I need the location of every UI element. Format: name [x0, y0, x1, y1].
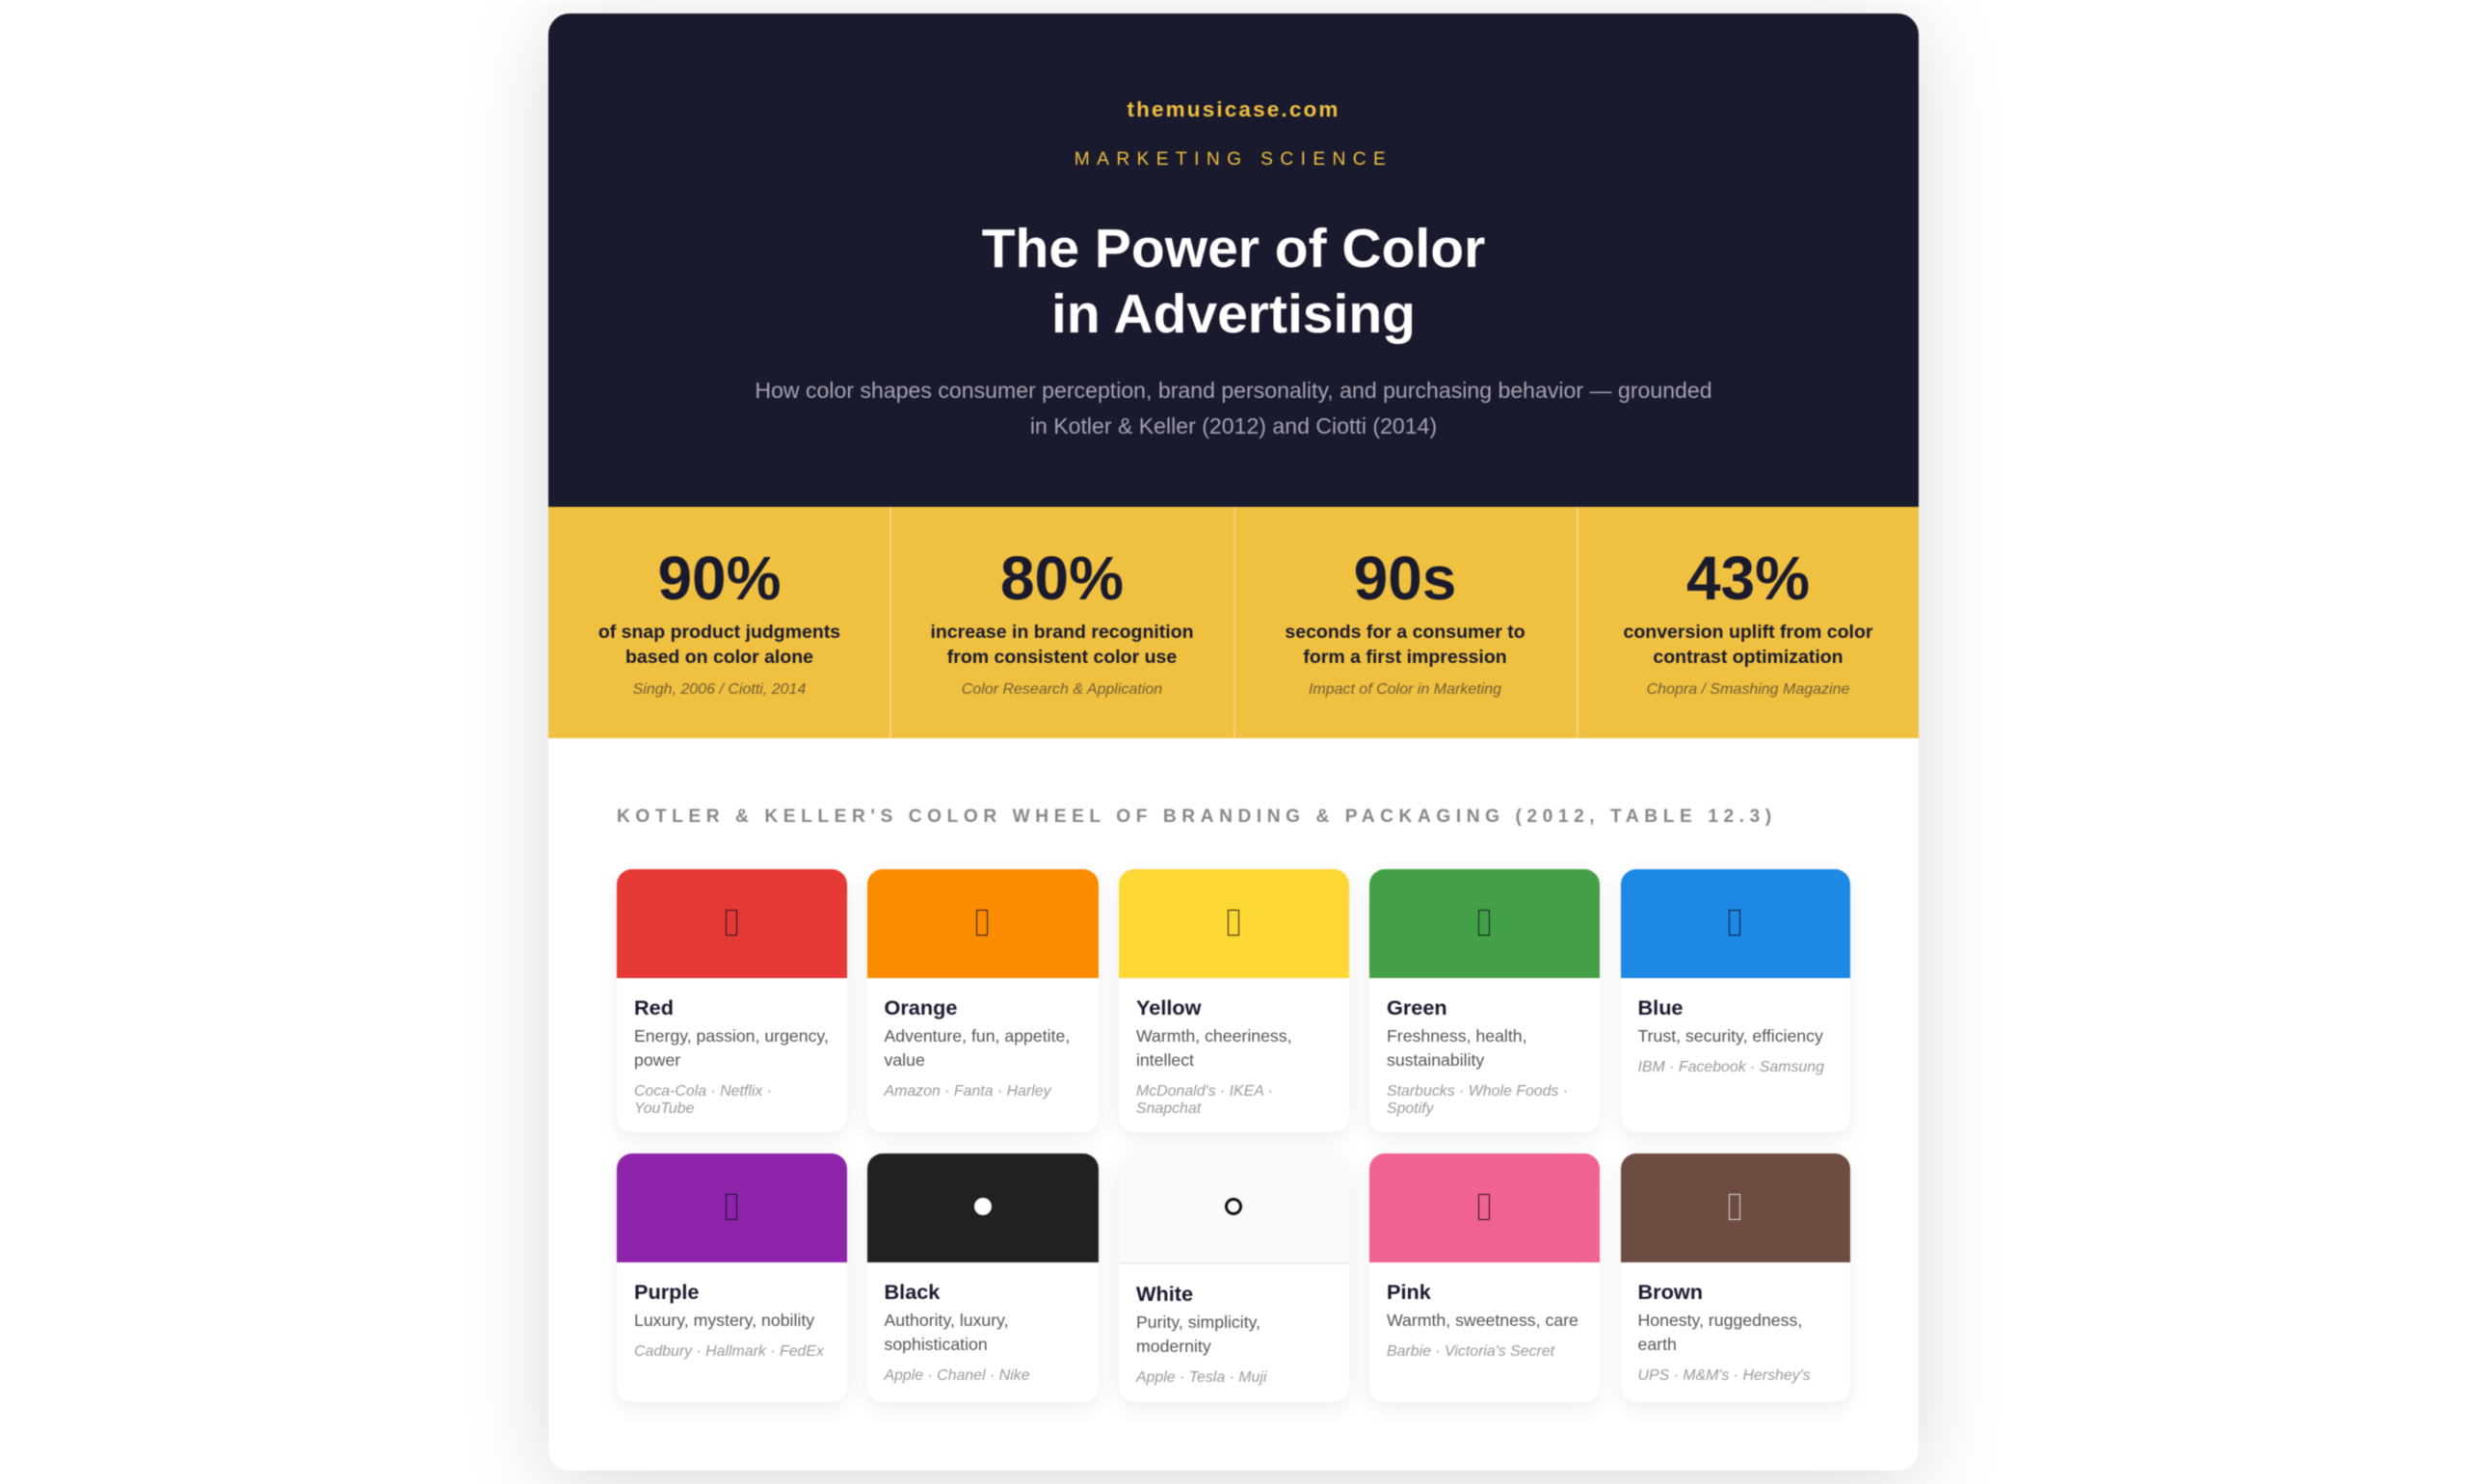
stat: 90% snap judgments: of snap product judgments — [598, 621, 840, 642]
card: orange: Adventure, fun, appetite, — [885, 1026, 1070, 1046]
card: brown: UPS · M&M's · Hershey's — [1638, 1366, 1811, 1384]
card: yellow — [1119, 869, 1349, 1132]
stat: 90% snap judgments: based on color alone — [625, 647, 813, 668]
card: yellow: intellect — [1136, 1050, 1194, 1070]
card: red: power — [634, 1050, 680, 1070]
card: black: sophistication — [885, 1335, 988, 1354]
icon: purple swatch — [617, 1153, 846, 1262]
card: brown — [1621, 1153, 1850, 1402]
icon: brown swatch — [1621, 1153, 1850, 1262]
card: black — [867, 1153, 1099, 1402]
icon: white swatch with ring — [1119, 1153, 1349, 1264]
card: pink: Pink — [1387, 1280, 1431, 1304]
section heading: KOTLER & KELLER'S COLOR WHEEL OF BRANDING & PACKAGING (2012, TABLE 12.3) — [617, 807, 1777, 827]
stat: 43% conversion uplift: 43% — [1686, 543, 1810, 613]
stat: 80% brand recognition — [930, 543, 1194, 698]
card: white: Purity, simplicity, — [1136, 1312, 1260, 1332]
stat: 80% brand recognition: 80% — [1000, 543, 1124, 613]
site name: themusicase.com — [1127, 97, 1340, 121]
panel: header — [548, 13, 1919, 507]
card: green: Spotify — [1387, 1100, 1434, 1116]
card: black: Apple · Chanel · Nike — [885, 1366, 1030, 1384]
card: black: Black — [885, 1280, 940, 1304]
stat: 90s first impression: Impact of Color in Marketing — [1309, 681, 1501, 698]
card: green: Starbucks · Whole Foods · — [1387, 1083, 1568, 1099]
eyebrow: MARKETING SCIENCE — [1074, 148, 1393, 170]
stat: 90s first impression — [1285, 543, 1525, 698]
stat: 43% conversion uplift: Chopra / Smashing Magazine — [1647, 681, 1849, 698]
stat: 90s first impression: form a first impression — [1303, 647, 1507, 668]
card: yellow: McDonald's · IKEA · — [1136, 1083, 1273, 1099]
stat: 90s first impression: seconds for a consumer to — [1285, 621, 1525, 642]
subtitle — [755, 378, 1712, 439]
stat: 80% brand recognition: Color Research & Application — [962, 681, 1162, 698]
subtitle: How color shapes consumer perception, brand personality, and purchasing behavior — grounded — [755, 378, 1712, 403]
card: brown: Honesty, ruggedness, — [1638, 1311, 1802, 1330]
card: purple: Luxury, mystery, nobility — [634, 1311, 814, 1330]
icon: blue swatch — [1621, 869, 1850, 978]
card: green: Green — [1387, 995, 1447, 1020]
card: green — [1369, 869, 1600, 1132]
card: orange: Amazon · Fanta · Harley — [885, 1083, 1051, 1099]
card: red: Red — [634, 995, 674, 1020]
icon: red swatch — [617, 869, 846, 978]
card: pink: Warmth, sweetness, care — [1387, 1311, 1578, 1330]
card: red: Coca-Cola · Netflix · — [634, 1083, 772, 1099]
title: The Power of Color — [982, 218, 1485, 279]
card: red — [617, 869, 846, 1132]
card: black: Authority, luxury, — [885, 1311, 1009, 1330]
stat: 43% conversion uplift: conversion uplift from color — [1624, 621, 1872, 642]
card: orange: Orange — [885, 995, 957, 1020]
card: blue: IBM · Facebook · Samsung — [1638, 1058, 1824, 1075]
icon: black swatch with white dot — [867, 1153, 1099, 1262]
stat: 90% snap judgments — [597, 543, 840, 698]
title: in Advertising — [1051, 283, 1416, 345]
card: yellow: Snapchat — [1136, 1100, 1201, 1116]
card: brown: earth — [1638, 1335, 1677, 1354]
icon: orange swatch — [867, 869, 1099, 978]
stat: 43% conversion uplift — [1623, 543, 1873, 698]
stat: 80% brand recognition: from consistent color use — [947, 647, 1177, 668]
card: purple: Cadbury · Hallmark · FedEx — [634, 1343, 824, 1359]
card: purple: Purple — [634, 1280, 700, 1304]
card: red: YouTube — [634, 1100, 694, 1116]
card: green: Freshness, health, — [1387, 1026, 1527, 1046]
card: purple — [617, 1153, 846, 1402]
stat: 90s first impression: 90s — [1354, 543, 1456, 613]
stat: 80% brand recognition: increase in brand recognition — [930, 621, 1194, 642]
card: pink: Barbie · Victoria's Secret — [1387, 1343, 1554, 1359]
card: white: White — [1136, 1282, 1193, 1306]
icon: yellow swatch — [1119, 869, 1349, 978]
icon: green swatch — [1369, 869, 1600, 978]
stat: 43% conversion uplift: contrast optimization — [1653, 647, 1844, 668]
stat: 90% snap judgments: Singh, 2006 / Ciotti, 2014 — [633, 681, 806, 698]
main sheet — [548, 13, 1919, 1471]
card: pink — [1369, 1153, 1600, 1402]
title — [981, 218, 1486, 345]
card: brown: Brown — [1638, 1280, 1703, 1304]
card: blue — [1621, 869, 1850, 1132]
stat: 90% snap judgments: 90% — [657, 543, 782, 613]
card: blue: Blue — [1638, 995, 1683, 1020]
card: white: Apple · Tesla · Muji — [1136, 1368, 1266, 1386]
card: yellow: Yellow — [1136, 995, 1201, 1020]
card: yellow: Warmth, cheeriness, — [1136, 1026, 1292, 1046]
card: blue: Trust, security, efficiency — [1638, 1026, 1823, 1046]
card: orange: value — [885, 1050, 925, 1070]
card: orange — [867, 869, 1099, 1132]
icon: pink swatch — [1369, 1153, 1600, 1262]
subtitle: in Kotler & Keller (2012) and Ciotti (2014) — [1030, 413, 1437, 438]
card: green: sustainability — [1387, 1050, 1484, 1070]
panel: key statistics — [548, 507, 1919, 738]
card: white: modernity — [1136, 1337, 1211, 1356]
card: white — [1119, 1153, 1349, 1402]
card: red: Energy, passion, urgency, — [634, 1026, 829, 1046]
